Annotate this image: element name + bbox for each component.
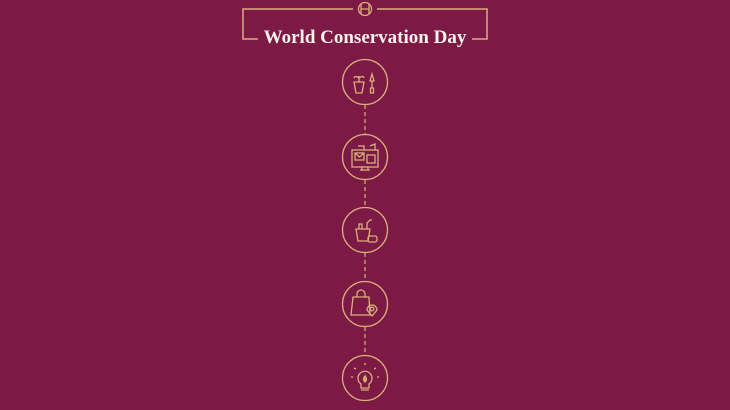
title frame: [243, 9, 487, 39]
icon: shopping bag with location pin: [342, 282, 388, 326]
title: World Conservation Day: [264, 27, 467, 48]
icon: computer with media: [342, 134, 388, 180]
icon: light bulb: [342, 356, 388, 400]
connector dashed line: [364, 105, 366, 355]
icon: plant and trowel: [342, 60, 388, 104]
icon: emblem: [358, 2, 372, 16]
icon: cleaning supplies: [342, 208, 388, 252]
